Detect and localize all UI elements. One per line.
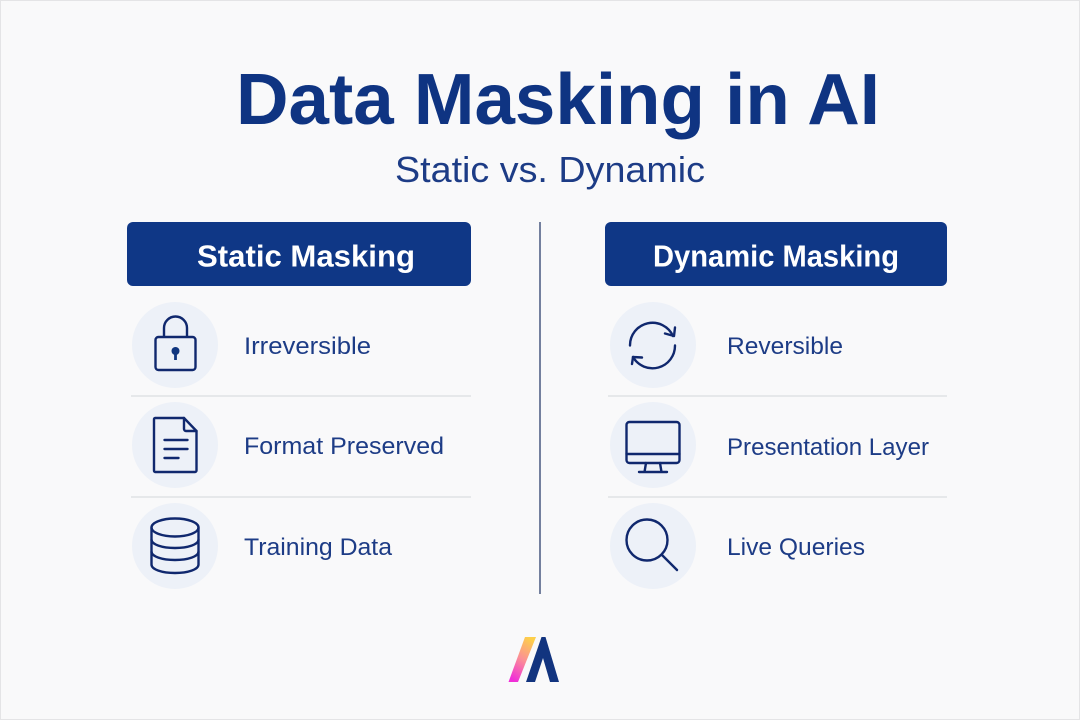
heading: static masking: Static Masking xyxy=(197,238,415,274)
icon: refresh arrows xyxy=(610,302,696,388)
center divider xyxy=(539,222,541,594)
panel: dynamic masking xyxy=(605,222,947,589)
panel: static masking xyxy=(127,222,471,589)
label: format preserved: Format Preserved xyxy=(244,433,444,460)
label: presentation layer: Presentation Layer xyxy=(727,434,929,461)
label: training data: Training Data xyxy=(244,534,393,561)
title: Data Masking in AI xyxy=(236,60,880,140)
icon: magnifying glass xyxy=(610,503,696,589)
icon: padlock xyxy=(132,302,218,388)
heading: dynamic masking xyxy=(605,222,947,286)
label: irreversible: Irreversible xyxy=(244,333,371,360)
subtitle: Static vs. Dynamic xyxy=(395,149,705,190)
icon: monitor xyxy=(610,402,696,488)
icon: document xyxy=(132,402,218,488)
label: reversible: Reversible xyxy=(727,333,843,360)
heading: dynamic masking: Dynamic Masking xyxy=(653,238,899,274)
heading: static masking xyxy=(127,222,471,286)
label: live queries: Live Queries xyxy=(727,534,865,561)
logo xyxy=(508,637,559,682)
icon: database xyxy=(132,503,218,589)
